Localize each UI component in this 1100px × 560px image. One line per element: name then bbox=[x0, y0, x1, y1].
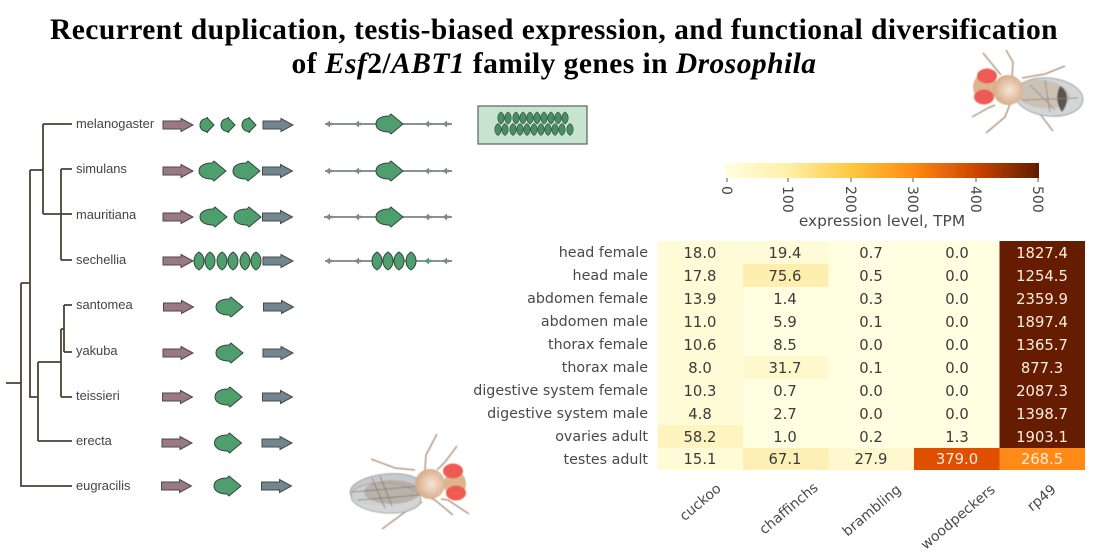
row: abdomen female: 2359.9 bbox=[1016, 291, 1068, 308]
species labels: erecta bbox=[76, 433, 113, 448]
row: thorax male: thorax male bbox=[562, 360, 648, 376]
row: digestive system male: 2.7 bbox=[773, 406, 797, 423]
phylogenetic tree bbox=[6, 124, 72, 486]
column labels: cuckoo bbox=[677, 481, 725, 525]
row: abdomen female: 0.3 bbox=[859, 291, 883, 308]
row: digestive system male bbox=[487, 406, 1068, 423]
row: thorax male: 0.0 bbox=[945, 360, 969, 377]
row: head male: 0.0 bbox=[945, 268, 969, 285]
row: head male: 1254.5 bbox=[1016, 268, 1068, 285]
row: thorax female: 0.0 bbox=[945, 337, 969, 354]
row: head female: 0.7 bbox=[859, 245, 883, 262]
column labels: chaffinchs bbox=[757, 480, 822, 538]
focal green gene copies bbox=[194, 117, 261, 496]
row: testes adult: 379.0 bbox=[936, 451, 978, 468]
colorbar tick labels: 100 bbox=[779, 186, 795, 213]
row: thorax male: 31.7 bbox=[769, 360, 801, 377]
row: abdomen male: 0.0 bbox=[945, 314, 969, 331]
column labels bbox=[677, 480, 1060, 553]
row: ovaries adult: ovaries adult bbox=[555, 429, 648, 445]
species labels: teissieri bbox=[76, 388, 120, 403]
column labels: brambling bbox=[840, 482, 905, 540]
row: thorax male: 877.3 bbox=[1021, 360, 1063, 377]
row: abdomen female: abdomen female bbox=[527, 291, 648, 307]
row: abdomen male bbox=[541, 314, 1068, 331]
row: digestive system female: digestive system female bbox=[473, 383, 648, 399]
row: ovaries adult bbox=[555, 429, 1068, 446]
species labels bbox=[76, 116, 155, 493]
species labels: mauritiana bbox=[76, 207, 137, 222]
colorbar tick labels: 300 bbox=[904, 186, 920, 213]
row: head female: 0.0 bbox=[945, 245, 969, 262]
colorbar tick labels: 200 bbox=[842, 186, 858, 213]
row: abdomen male: abdomen male bbox=[541, 314, 648, 330]
row: ovaries adult: 58.2 bbox=[684, 429, 716, 446]
column labels: woodpeckers bbox=[918, 482, 999, 553]
row: testes adult: 15.1 bbox=[684, 451, 716, 468]
row: abdomen female: 13.9 bbox=[684, 291, 716, 308]
chromosome tracks with gene copies bbox=[324, 114, 452, 270]
row: digestive system female: 10.3 bbox=[684, 383, 716, 400]
flanking gene arrows: right bbox=[262, 118, 294, 492]
row: digestive system male: digestive system male bbox=[487, 406, 648, 422]
row: digestive system female: 2087.3 bbox=[1016, 383, 1068, 400]
species labels: sechellia bbox=[76, 252, 127, 267]
colorbar title: expression level, TPM bbox=[799, 212, 965, 230]
row: digestive system male: 0.0 bbox=[945, 406, 969, 423]
heatmap background cells bbox=[658, 241, 1085, 470]
row: ovaries adult: 1.0 bbox=[773, 429, 797, 446]
species labels: melanogaster bbox=[76, 116, 155, 131]
row: head female: 1827.4 bbox=[1016, 245, 1068, 262]
row: digestive system female bbox=[473, 383, 1068, 400]
row: thorax female: 0.0 bbox=[859, 337, 883, 354]
row: head female: 18.0 bbox=[684, 245, 716, 262]
row: head female: head female bbox=[559, 245, 648, 261]
row: digestive system male: 0.0 bbox=[859, 406, 883, 423]
row: thorax male: 0.1 bbox=[859, 360, 883, 377]
row: thorax female: 10.6 bbox=[684, 337, 716, 354]
species labels: simulans bbox=[76, 161, 127, 176]
row: abdomen female: 1.4 bbox=[773, 291, 797, 308]
row: testes adult bbox=[564, 451, 1063, 468]
row: thorax female: thorax female bbox=[548, 337, 648, 353]
row: head male bbox=[573, 268, 1068, 285]
title: of Esf2/ABT1 family genes in Drosophila bbox=[292, 48, 816, 80]
species labels: eugracilis bbox=[76, 478, 130, 493]
row: abdomen female bbox=[527, 291, 1068, 308]
row: ovaries adult: 1.3 bbox=[945, 429, 969, 446]
row: digestive system female: 0.0 bbox=[859, 383, 883, 400]
row: head male: 75.6 bbox=[769, 268, 801, 285]
row: digestive system male: 1398.7 bbox=[1016, 406, 1068, 423]
species labels: yakuba bbox=[76, 343, 118, 358]
row: testes adult: 268.5 bbox=[1021, 451, 1063, 468]
heatmap bbox=[473, 241, 1085, 553]
row: head male: 0.5 bbox=[859, 268, 883, 285]
row: ovaries adult: 1903.1 bbox=[1016, 429, 1068, 446]
row: thorax male: 8.0 bbox=[688, 360, 712, 377]
row: testes adult: 27.9 bbox=[855, 451, 887, 468]
inset box: tandem copies bbox=[478, 106, 587, 144]
title bbox=[50, 14, 1058, 80]
title: Recurrent duplication, testis-biased expression, and functional diversification bbox=[50, 14, 1058, 46]
row: abdomen male: 0.1 bbox=[859, 314, 883, 331]
row: thorax female bbox=[548, 337, 1068, 354]
icon: fly bottom bbox=[349, 434, 469, 529]
row: head female bbox=[559, 245, 1068, 262]
row: abdomen male: 5.9 bbox=[773, 314, 797, 331]
row: digestive system female: 0.7 bbox=[773, 383, 797, 400]
row: digestive system male: 4.8 bbox=[688, 406, 712, 423]
icon: fly top right bbox=[972, 50, 1085, 133]
row: abdomen male: 1897.4 bbox=[1016, 314, 1068, 331]
row: thorax male bbox=[562, 360, 1063, 377]
row: abdomen male: 11.0 bbox=[684, 314, 716, 331]
colorbar tick labels: 400 bbox=[967, 186, 983, 213]
column labels: rp49 bbox=[1024, 482, 1060, 515]
row: head male: 17.8 bbox=[684, 268, 716, 285]
colorbar tick labels bbox=[718, 186, 1045, 213]
row: testes adult: testes adult bbox=[564, 452, 648, 468]
row: thorax female: 1365.7 bbox=[1016, 337, 1068, 354]
row: testes adult: 67.1 bbox=[769, 451, 801, 468]
colorbar tick labels: 0 bbox=[718, 186, 734, 195]
colorbar tick labels: 500 bbox=[1029, 186, 1045, 213]
flanking gene arrows: left bbox=[162, 118, 194, 492]
row: head female: 19.4 bbox=[769, 245, 801, 262]
species labels: santomea bbox=[76, 297, 133, 312]
row: ovaries adult: 0.2 bbox=[859, 429, 883, 446]
row: abdomen female: 0.0 bbox=[945, 291, 969, 308]
colorbar legend bbox=[718, 163, 1045, 230]
row: digestive system female: 0.0 bbox=[945, 383, 969, 400]
row: thorax female: 8.5 bbox=[773, 337, 797, 354]
row: head male: head male bbox=[573, 268, 648, 284]
